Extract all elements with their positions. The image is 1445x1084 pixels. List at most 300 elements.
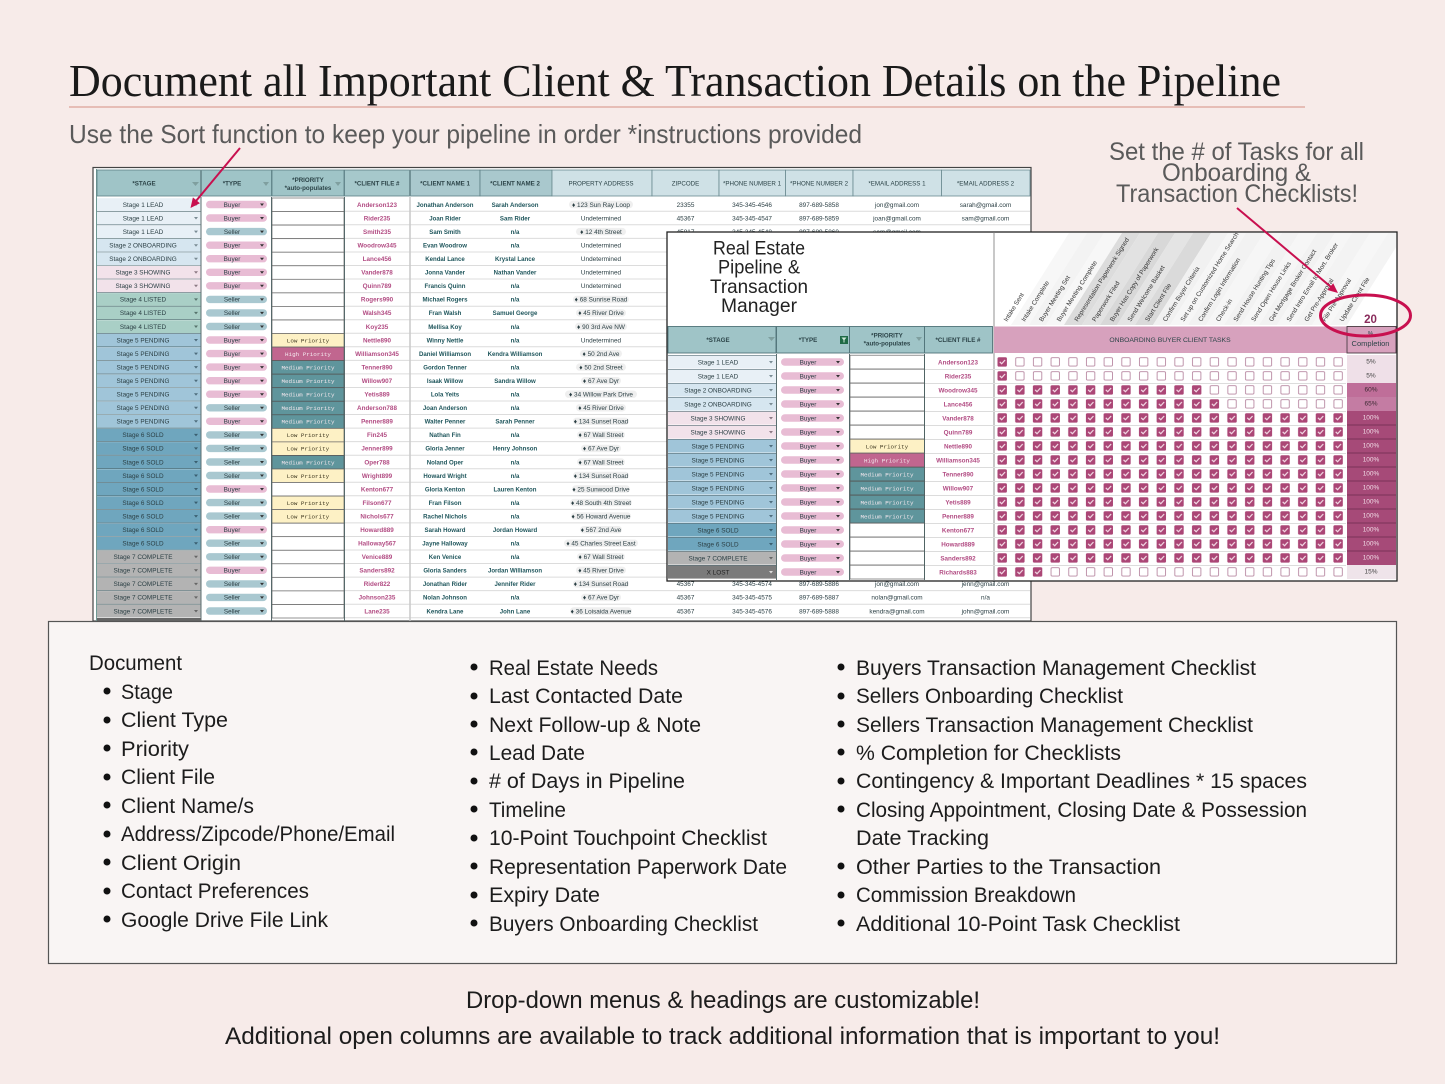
table data rows: Ken Venice [429,554,462,561]
front data rows: Anderson123 [938,359,978,366]
table data rows: ♦ 67 Wall Street [579,432,624,439]
front data rows: Buyer [800,401,817,408]
table data rows: Undetermined [581,242,622,249]
table data rows: Low Priority [287,513,330,520]
table header row: ZIPCODE [672,180,699,187]
table data rows: jenn@gmail.com [961,581,1009,588]
table data rows: 345-345-4548 [732,229,772,236]
front header row: *STAGE [706,337,730,344]
table data rows: n/a [511,297,520,304]
front data rows: Stage 6 SOLD [697,527,739,534]
table data rows: nolan@gmail.com [871,595,923,602]
table data rows: Henry Johnson [493,446,537,453]
table data rows: Undetermined [581,256,622,263]
table data rows: Michael Rogers [422,297,468,304]
table data rows: Stage 7 COMPLETE [114,595,172,602]
table data rows: ♦ 45 River Drive [578,405,624,412]
table data rows: Penner889 [361,419,393,426]
table data rows: Sam Rider [500,215,531,222]
table data rows: Johnson235 [359,595,396,602]
table data rows: Sanders892 [359,568,395,575]
table data rows: ♦ 134 Sunset Road [574,419,629,426]
table data rows: Medium Priority [281,419,335,426]
rotated task labels: Get Pre-Approval [1303,277,1335,323]
table data rows: Francis Quinn [425,283,466,290]
table data rows: Kenton677 [361,486,394,493]
front data rows: Stage 5 PENDING [692,499,744,506]
list column 1: Client Origin [121,851,241,875]
front data rows: Medium Priority [860,485,914,492]
list column 3: Additional 10-Point Task Checklist [856,912,1180,936]
table data rows: 897-689-5859 [799,215,839,222]
rotated task labels: Set up on Customized Home Search [1180,231,1241,323]
front data rows: Vander878 [942,415,974,422]
callout: set the number of tasks: Set the # of Tasks for all [1109,138,1364,166]
list column 1: Stage [121,680,173,704]
table data rows: Daniel Williamson [419,351,471,358]
table data rows: Lauren Kenton [494,486,537,493]
table data rows: Gloria Kenton [425,486,465,493]
front data rows: Buyer [800,569,817,576]
percent completion column: 100% [1363,414,1380,422]
table data rows: Buyer [224,351,241,358]
rotated task labels: Confirm Login Information [1197,257,1242,323]
table data rows: Nathan Vander [494,270,537,277]
list column 2: # of Days in Pipeline [489,769,685,793]
table data rows: ♦ 36 Loisaida Avenue [571,608,632,615]
table data rows: n/a [511,392,520,399]
percent completion column: 100% [1363,526,1380,534]
table data rows: Seller [224,459,241,466]
table header row: PROPERTY ADDRESS [568,180,634,187]
table data rows: Medium Priority [281,459,335,466]
callout: set the number of tasks: Transaction Checklists! [1116,180,1358,208]
front header row: *TYPE [799,337,817,344]
percent completion column: 60% [1364,386,1378,394]
table data rows: Seller [224,554,241,561]
table header row: *PHONE NUMBER 2 [790,180,849,187]
table data rows: n/a [511,513,520,520]
table data rows: Buyer [224,568,241,575]
table data rows: n/a [511,364,520,371]
list column 3: Other Parties to the Transaction [856,855,1161,879]
percent completion column: 15% [1364,568,1378,576]
table data rows: n/a [511,541,520,548]
table data rows: Stage 7 COMPLETE [114,568,172,575]
table data rows: Low Priority [287,446,330,453]
list column 2: Timeline [489,798,566,822]
back spreadsheet: full pipeline table [93,168,1031,621]
table data rows: Seller [224,229,241,236]
percent completion column: 100% [1363,470,1380,478]
table data rows: ♦ 34 Willow Park Drive [569,392,633,399]
table data rows: n/a [511,229,520,236]
table data rows: n/a [511,554,520,561]
table data rows: 345-345-4575 [732,595,772,602]
front data rows: Buyer [800,513,817,520]
table data rows: n/a [511,595,520,602]
list column 1: Priority [121,737,189,761]
list column 2: Last Contacted Date [489,684,683,708]
front data rows: Yetis889 [945,499,971,506]
table data rows: joan@gmail.com [872,215,921,222]
table data rows: ♦ 67 Ave Dyr [583,446,620,453]
table data rows: Mellisa Koy [428,324,462,331]
table data rows: ♦ 67 Ave Dyr [583,595,620,602]
table data rows: Stage 4 LISTED [120,297,166,304]
table data rows: Seller [224,581,241,588]
percent completion column: 100% [1363,512,1380,520]
table data rows: Seller [224,500,241,507]
table data rows: Stage 3 SHOWING [115,283,171,290]
front data rows: Stage 1 LEAD [698,359,739,366]
table data rows: 345-345-4546 [732,202,772,209]
front data rows: Stage 3 SHOWING [690,429,746,436]
table data rows: Buyer [224,337,241,344]
front data rows: Buyer [800,471,817,478]
title: Document all Important Client & Transaction Details on the Pipeline [69,55,1281,106]
table data rows: Stage 6 SOLD [122,541,164,548]
table data rows: Undetermined [581,215,622,222]
list column 1: Contact Preferences [121,879,309,903]
front data rows: Medium Priority [860,499,914,506]
table data rows: Medium Priority [281,405,335,412]
table data rows: n/a [511,405,520,412]
table data rows: ♦ 12 4th Street [580,229,622,236]
table data rows: ♦ 123 Sun Ray Loop [572,202,630,209]
table header row: *PRIORITY [292,177,325,184]
table data rows: 45367 [677,581,695,588]
table data rows: Jonathan Rider [423,581,468,588]
rotated task labels: File Pre-Approval [1321,277,1353,323]
table data rows: High Priority [285,351,331,358]
front data rows: Stage 2 ONBOARDING [684,387,752,394]
footer notes [225,987,1220,1050]
table data rows: 897-689-5860 [799,229,839,236]
table data rows: Buyer [224,242,241,249]
front data rows: Willow907 [943,485,974,492]
table data rows: Medium Priority [281,392,335,399]
list column 3: Date Tracking [856,826,989,850]
list column 1: Google Drive File Link [121,908,328,932]
table data rows: Stage 7 COMPLETE [114,554,172,561]
rotated task labels: Send Open House Links [1250,261,1293,323]
subtitle: Use the Sort function to keep your pipeline in order *instructions provided [69,119,862,149]
rotated task labels: Intake Sent [1003,292,1026,323]
table data rows: Stage 6 SOLD [122,500,164,507]
panel: document list [48,622,1396,964]
list column 3: Commission Breakdown [856,883,1076,907]
table data rows: ♦ 48 South 4th Street [571,500,631,507]
list column 3: Contingency & Important Deadlines * 15 spaces [856,769,1307,793]
front data rows: Buyer [800,387,817,394]
table header row: *CLIENT NAME 1 [420,180,470,187]
table data rows: Stage 6 SOLD [122,459,164,466]
table data rows [97,198,1011,618]
table data rows: Walter Penner [425,419,466,426]
table data rows: John Lane [500,608,531,615]
table data rows: 897-689-5888 [799,608,839,615]
front data rows: Stage 5 PENDING [692,443,744,450]
front data rows: Williamson345 [936,457,980,464]
table data rows: Oper788 [364,459,390,466]
list column 2: Expiry Date [489,883,600,907]
table data rows: Stage 7 COMPLETE [114,608,172,615]
table data rows: ♦ 90 3rd Ave NW [577,324,626,331]
table data rows: 345-345-4547 [732,215,772,222]
table header row: *CLIENT NAME 2 [490,180,540,187]
front data rows: Buyer [800,555,817,562]
table data rows: Seller [224,513,241,520]
arrow: to task count [1237,208,1338,293]
list column 1: Client Type [121,708,228,732]
front data rows: Howard889 [941,541,975,548]
front header row [668,326,1396,353]
table data rows: Kendra Lane [427,608,464,615]
percent completion column: 5% [1366,372,1376,380]
table data rows: Stage 4 LISTED [120,310,166,317]
arrow: to stage sort dropdown [190,148,240,208]
percent completion column: 100% [1363,442,1380,450]
table data rows: n/a [981,595,990,602]
table data rows: Seller [224,310,241,317]
list column 3: Buyers Transaction Management Checklist [856,656,1256,680]
table data rows: Stage 6 SOLD [122,486,164,493]
table data rows: Fran Filson [429,500,462,507]
front data rows: Buyer [800,373,817,380]
rotated task labels: Buyer Has Copy of Paperwork [1109,246,1161,323]
table data rows: ♦ 25 Sunwood Drive [572,486,630,493]
front data rows: Buyer [800,443,817,450]
rotated task labels: Send Intro Email to Mort. Broker [1286,241,1340,323]
checkbox grid [993,355,1347,579]
table data rows: Seller [224,446,241,453]
table data rows: Undetermined [581,270,622,277]
front data rows: Stage 7 COMPLETE [689,555,747,562]
table data rows: Stage 1 LEAD [123,202,164,209]
callout circle around task count [1320,295,1410,336]
table data rows: n/a [511,459,520,466]
table data rows: Stage 6 SOLD [122,527,164,534]
table data rows: n/a [511,242,520,249]
front data rows: Buyer [800,527,817,534]
table data rows: Stage 6 SOLD [122,513,164,520]
table data rows: ♦ 45 River Drive [578,310,624,317]
list column 2: Real Estate Needs [489,656,658,680]
table data rows: Stage 1 LEAD [123,229,164,236]
table data rows: ♦ 134 Sunset Road [574,473,629,480]
table data rows: ♦ 50 2nd Street [579,364,623,371]
table data rows: 23355 [677,202,695,209]
table header row: *TYPE [223,180,241,187]
table data rows: Tenner890 [361,364,393,371]
footer notes: Additional open columns are available to track additional information that is important to you! [225,1023,1220,1050]
table data rows: Quinn789 [363,283,392,290]
rotated task labels: Buyer Meeting Set [1038,275,1072,323]
table data rows: ♦ 67 Wall Street [579,554,624,561]
front data rows: Stage 3 SHOWING [690,415,746,422]
table data rows: Rider235 [364,215,391,222]
table data rows: Buyer [224,527,241,534]
table data rows: Nathan Fin [429,432,461,439]
table data rows: Stage 5 PENDING [117,337,169,344]
table data rows: Buyer [224,283,241,290]
table data rows: Rider822 [364,581,391,588]
table data rows: Low Priority [287,500,330,507]
table data rows: Stage 3 SHOWING [115,270,171,277]
front data rows: X LOST [707,569,729,576]
table data rows: ♦ 567 2nd Ave [581,527,622,534]
list column 3 [838,656,1307,936]
table data rows: ♦ 50 2nd Ave [583,351,620,358]
table data rows: Gordon Tenner [423,364,467,371]
table data rows: ♦ 134 Sunset Road [574,581,629,588]
table data rows: Stage 5 PENDING [117,364,169,371]
table data rows: Walsh345 [363,310,392,317]
list column 1: Client Name/s [121,794,254,818]
percent completion column: 100% [1363,498,1380,506]
table data rows: Willow907 [362,378,393,385]
front data rows: Low Priority [866,443,909,450]
list column 2: Representation Paperwork Date [489,855,787,879]
table data rows: Winny Nettle [427,337,464,344]
front data rows [668,355,980,579]
table data rows: Lane235 [364,608,390,615]
table data rows: Gloria Sanders [423,568,467,575]
list column 3: % Completion for Checklists [856,741,1121,765]
table header row: *CLIENT FILE # [354,180,400,187]
table data rows: Jordan Howard [493,527,537,534]
table data rows: Samuel George [493,310,538,317]
table data rows: Buyer [224,256,241,263]
table data rows: Nichols677 [360,513,394,520]
rotated task labels: Representation Paperwork Signed [1073,236,1131,323]
list column 1: Document [89,651,182,675]
rotated task labels: Get Mortgage Broker Contact [1268,248,1318,323]
table data rows: Kendra Williamson [488,351,543,358]
table data rows: Medium Priority [281,378,335,385]
table data rows: sarah@gmail.com [960,202,1011,209]
percent completion column: 100% [1363,540,1380,548]
table data rows: 45367 [677,608,695,615]
table data rows: Low Priority [287,337,330,344]
table data rows: Buyer [224,486,241,493]
table data rows: Jordan Williamson [488,568,542,575]
table data rows: Seller [224,541,241,548]
front data rows: Rider235 [945,373,972,380]
table data rows: Low Priority [287,432,330,439]
table data rows: Buyer [224,202,241,209]
percent completion column: 65% [1364,400,1378,408]
table data rows: jon@gmail.com [874,581,919,588]
front data rows: Woodrow345 [938,387,978,394]
rotated task labels: Check-in [1215,298,1234,323]
table data rows: Woodrow345 [357,242,397,249]
front data rows: Penner889 [942,513,974,520]
table data rows: ♦ 45 Charles Street East [566,541,636,548]
rotated task labels: Paperwork Filed [1091,280,1122,323]
table data rows: Nolan Johnson [423,595,467,602]
table data rows: 897-689-5858 [799,202,839,209]
table data rows: Smith235 [363,229,391,236]
front data rows: Buyer [800,429,817,436]
sheet title: Real Estate [713,238,805,260]
table data rows: n/a [511,432,520,439]
table data rows: Howard889 [360,527,394,534]
front data rows: Buyer [800,485,817,492]
table data rows: Koy235 [366,324,389,331]
rotated task labels: Buyer Meeting Complete [1056,259,1099,323]
table data rows: Krystal Lance [495,256,536,263]
table data rows: 897-689-5887 [799,595,839,602]
rotated task labels: Update Client File [1339,276,1372,323]
table data rows: sam@gmail.com [962,215,1009,222]
list column 3: Sellers Transaction Management Checklist [856,713,1253,737]
list column 1: Address/Zipcode/Phone/Email [121,822,395,846]
sheet title: Manager [721,295,797,317]
list column 1: Client File [121,765,215,789]
list column 1 [89,651,395,932]
list column 2: Next Follow-up & Note [489,713,701,737]
table data rows: Vander878 [361,270,393,277]
rotated task labels: Intake Complete [1020,280,1051,323]
title underline [69,106,1305,108]
table header row: *EMAIL ADDRESS 2 [957,180,1015,187]
list column 2: Buyers Onboarding Checklist [489,912,758,936]
front header row: ONBOARDING BUYER CLIENT TASKS [1109,337,1231,344]
table data rows: Stage 2 ONBOARDING [109,256,177,263]
front data rows: Stage 1 LEAD [698,373,739,380]
table data rows: Sandra Willow [494,378,536,385]
percent completion column: 100% [1363,428,1380,436]
front data rows: Stage 6 SOLD [697,541,739,548]
table data rows: Stage 5 PENDING [117,392,169,399]
table data rows: Lance456 [363,256,392,263]
front data rows: Nettle890 [944,443,972,450]
table data rows: Buyer [224,378,241,385]
table data rows: Joan Anderson [423,405,467,412]
table data rows: 45367 [677,595,695,602]
table data rows: Undetermined [581,283,622,290]
table data rows: Stage 5 PENDING [117,378,169,385]
rotated task labels: Send Welcome Basket [1127,264,1167,323]
table data rows: Seller [224,473,241,480]
table data rows: Jayne Halloway [422,541,468,548]
front data rows: Medium Priority [860,513,914,520]
percent completion column [1347,355,1396,579]
table data rows: Stage 2 ONBOARDING [109,242,177,249]
front data rows: Stage 5 PENDING [692,513,744,520]
table data rows: n/a [511,283,520,290]
rotated task labels: Confirm Buyer Criteria [1162,265,1202,323]
front header row: *PRIORITY [871,332,904,339]
front data rows: Stage 5 PENDING [692,485,744,492]
front header row: Completion [1352,339,1389,348]
table data rows: Anderson788 [357,405,397,412]
list column 3: Sellers Onboarding Checklist [856,684,1123,708]
front data rows: Buyer [800,359,817,366]
table data rows: 345-345-4574 [732,581,772,588]
table data rows: Stage 5 PENDING [117,405,169,412]
percent completion column: 100% [1363,554,1380,562]
front data rows: Quinn789 [944,429,973,436]
task count: 20 [1364,314,1377,326]
front header row: % [1368,330,1374,337]
table data rows: Howard Wright [423,473,467,480]
table data rows: n/a [511,500,520,507]
table data rows: 45817 [677,229,695,236]
front header row: *CLIENT FILE # [935,337,981,344]
